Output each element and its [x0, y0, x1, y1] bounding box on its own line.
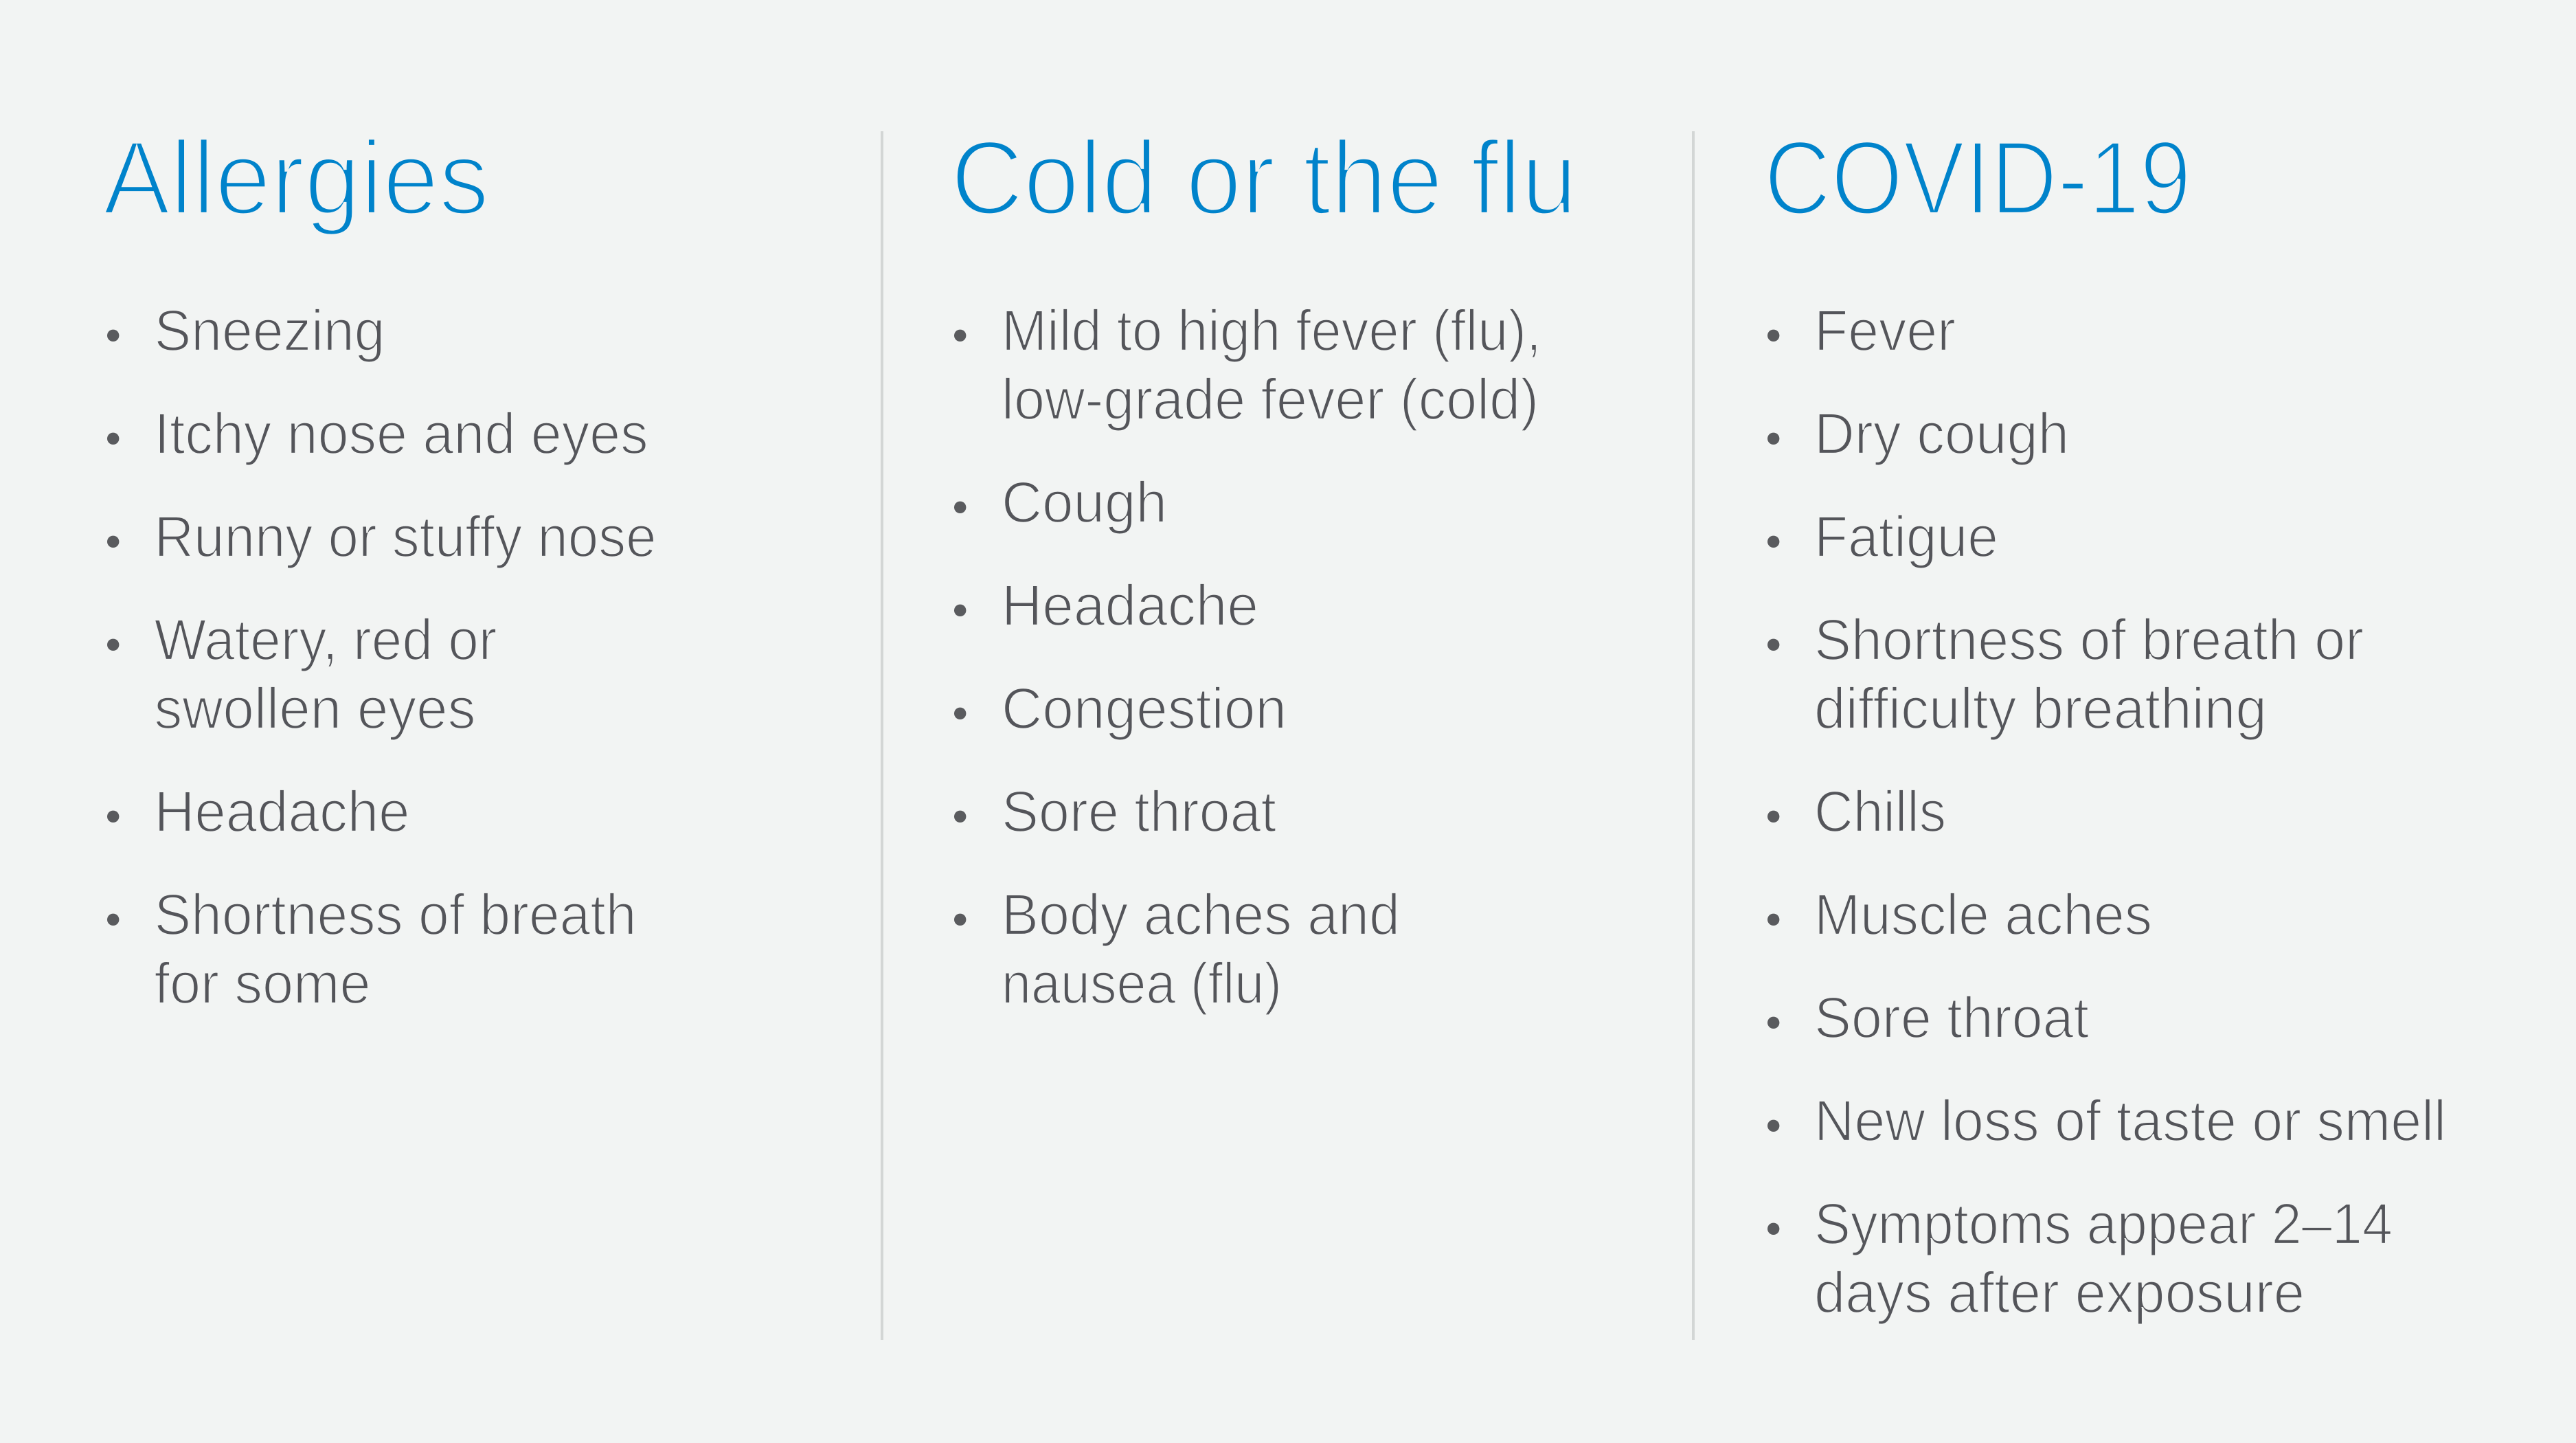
list item: shortness of breath for some	[107, 882, 636, 1016]
panel: allergies	[103, 120, 657, 1016]
list item: chills: Chills	[1814, 779, 1946, 844]
list item: runny or stuffy nose: Runny or stuffy nose	[154, 504, 657, 569]
list item: symptoms appear	[1767, 1192, 2393, 1325]
list item: symptoms appear: days after exposure	[1814, 1260, 2305, 1325]
panel: cold or the flu	[951, 120, 1577, 1016]
list item: watery, red or swollen eyes: Watery, red or	[154, 607, 497, 672]
list item: fever: Fever	[1814, 298, 1956, 363]
list item: watery, red or swollen eyes	[107, 607, 497, 741]
heading: covid-19: COVID-19	[1764, 120, 2191, 236]
list item: body aches and nausea: Body aches and	[1002, 882, 1400, 947]
list item: fever: low-grade fever (cold)	[1002, 367, 1539, 432]
list item: fever	[954, 298, 1541, 432]
list item: sneezing: Sneezing	[154, 298, 385, 363]
list item: sore throat: Sore throat	[1002, 779, 1276, 844]
heading: cold or the flu: Cold or the flu	[951, 120, 1577, 236]
panel: covid-19	[1764, 120, 2446, 1325]
heading: allergies: Allergies	[103, 120, 489, 236]
list item: headache: Headache	[1002, 573, 1258, 638]
list item: body aches and nausea	[954, 882, 1400, 1016]
list item: watery, red or swollen eyes: swollen eyes	[154, 676, 475, 741]
list item: shortness of breath: Shortness of breath or	[1814, 607, 2364, 672]
list item: congestion: Congestion	[1002, 676, 1287, 741]
list item: shortness of breath for some: Shortness of breath	[154, 882, 636, 947]
list item: body aches and nausea: nausea (flu)	[1002, 951, 1282, 1016]
list item: sore throat: Sore throat	[1814, 985, 2089, 1050]
list item: shortness of breath	[1767, 607, 2364, 741]
list item: muscle aches: Muscle aches	[1814, 882, 2152, 947]
list item: shortness of breath: difficulty breathing	[1814, 676, 2267, 741]
list item: fatigue: Fatigue	[1814, 504, 1998, 569]
list item: cough: Cough	[1002, 470, 1167, 535]
list item: shortness of breath for some: for some	[154, 951, 371, 1016]
list item: symptoms appear: Symptoms appear 2–14	[1814, 1192, 2393, 1256]
list item: itchy nose and eyes: Itchy nose and eyes	[154, 401, 648, 466]
list item: dry cough: Dry cough	[1814, 401, 2069, 466]
list item: fever: Mild to high fever (flu),	[1002, 298, 1541, 363]
list item: chills	[1767, 779, 1946, 844]
list item: new loss of taste or smell: New loss of taste or smell	[1814, 1088, 2446, 1153]
list item: headache: Headache	[154, 779, 409, 844]
